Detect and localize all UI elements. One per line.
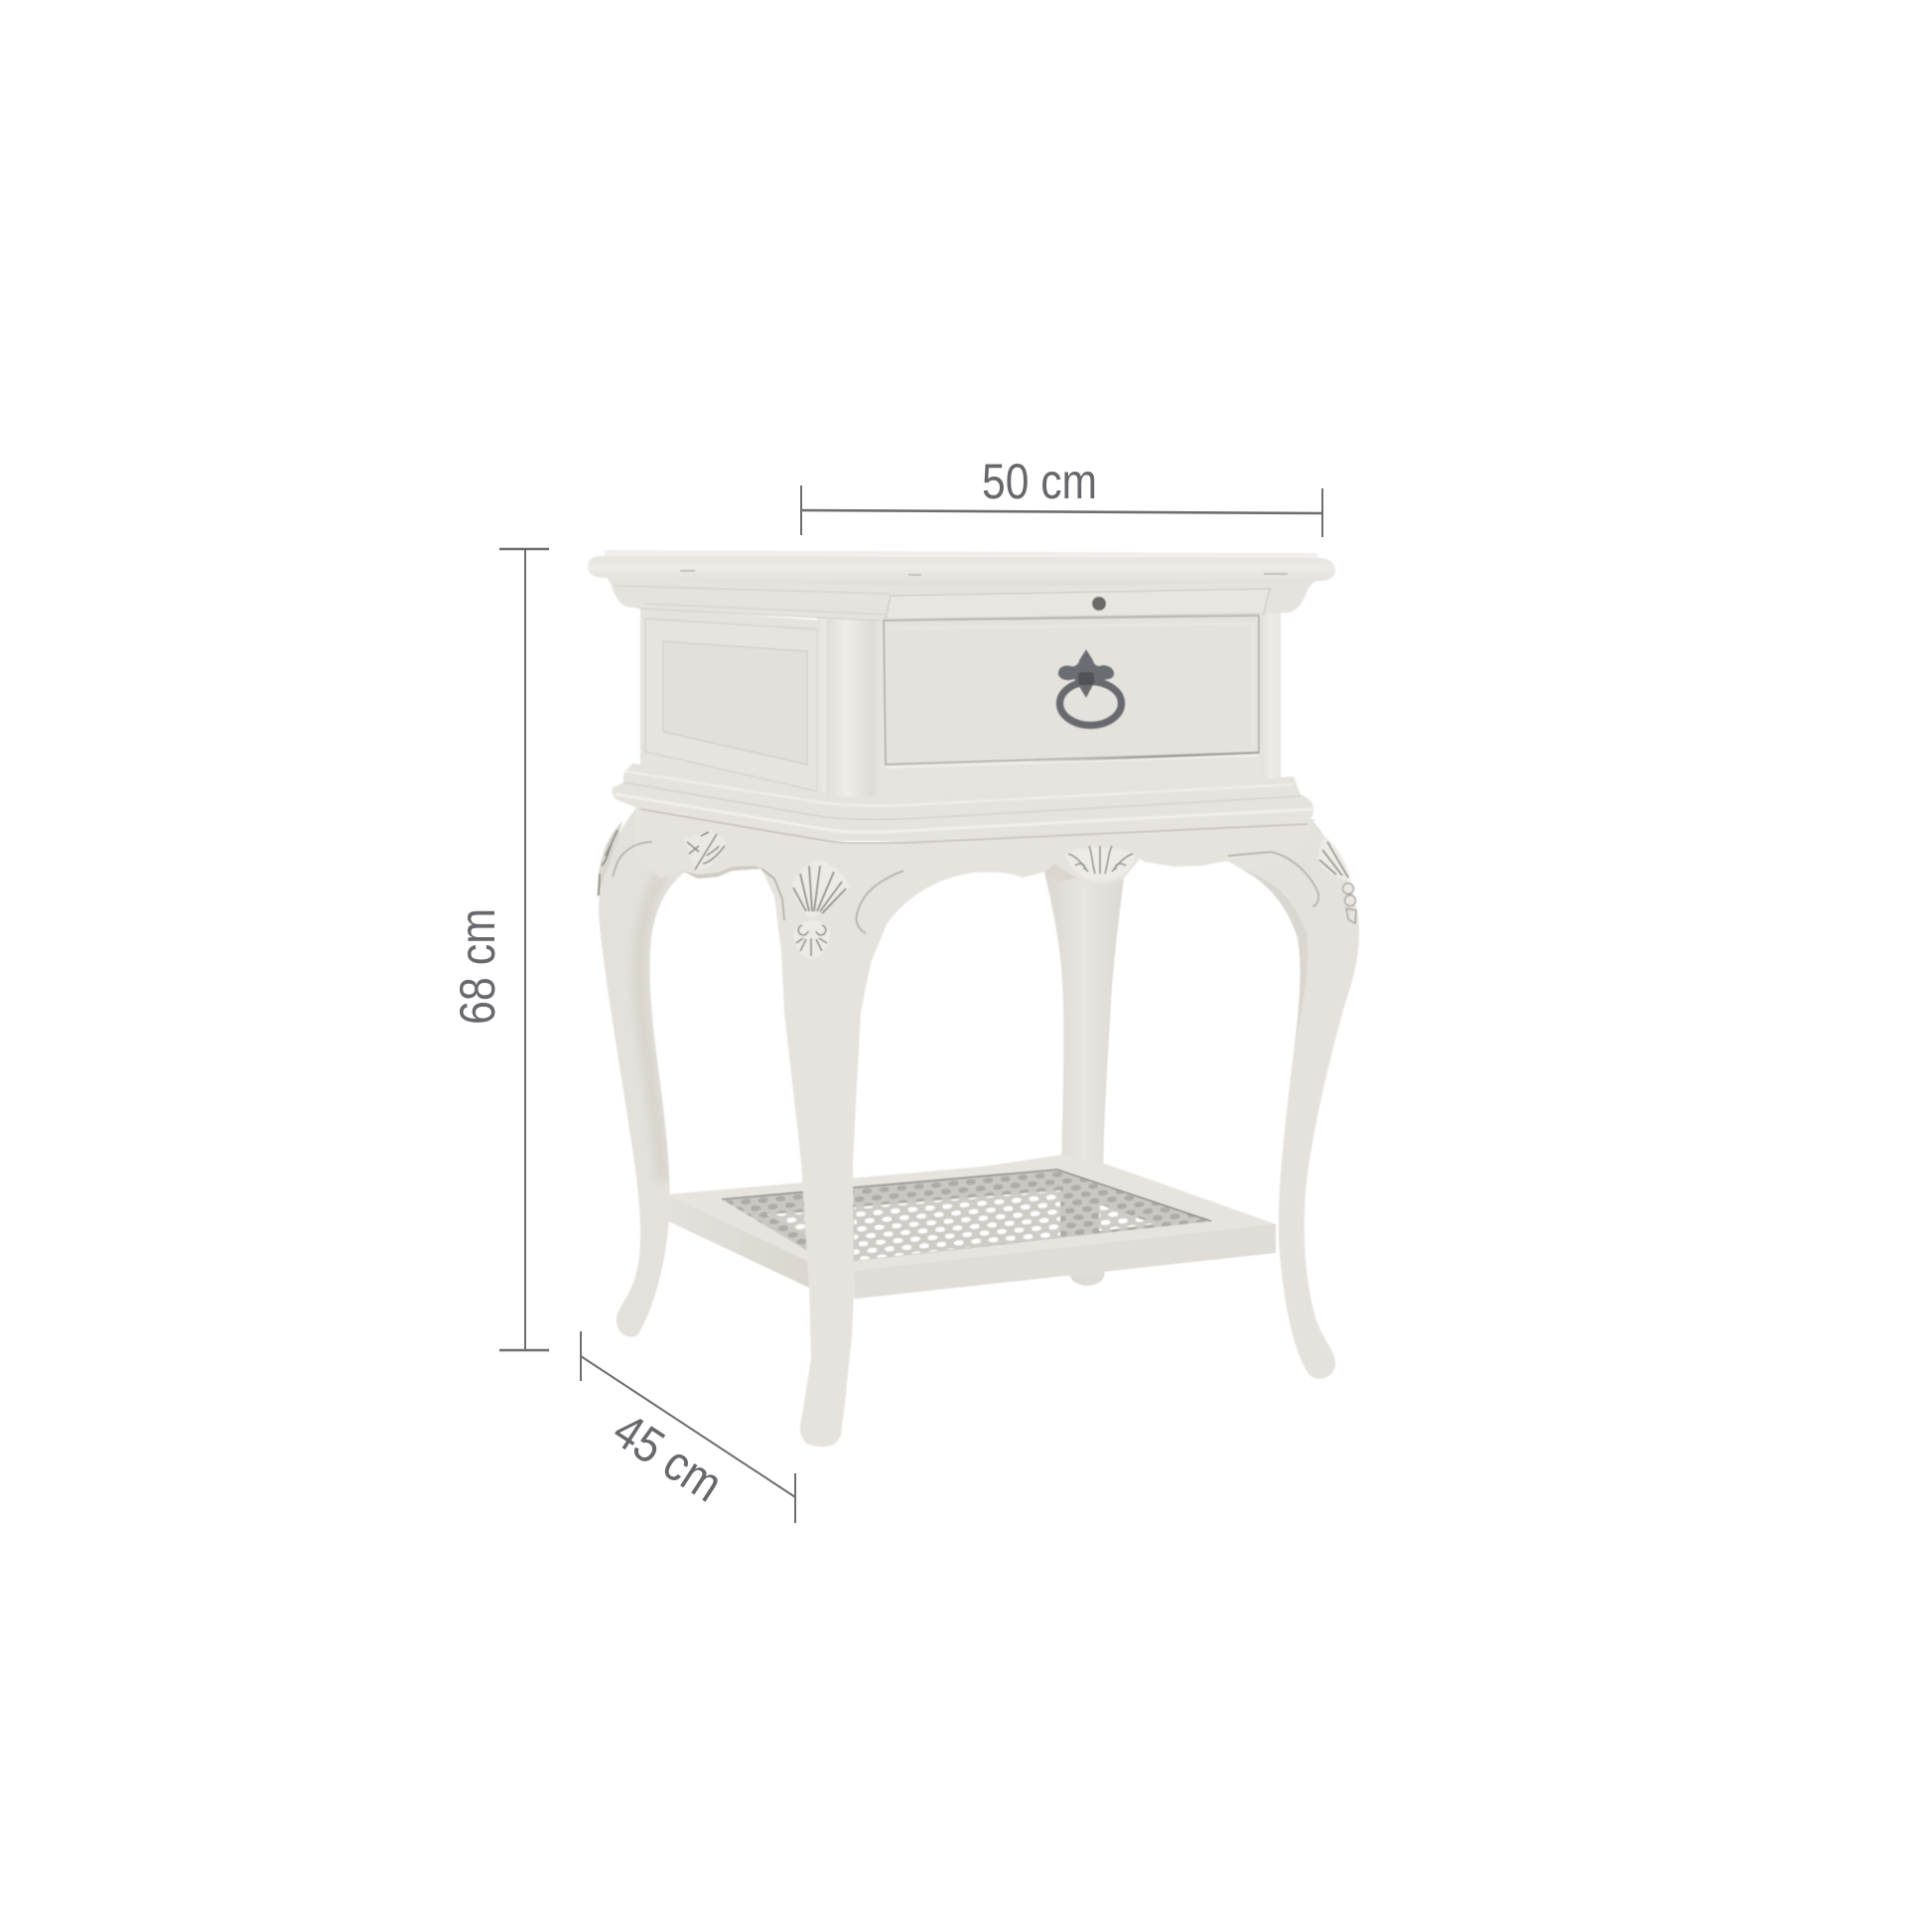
back left leg inner shading bbox=[639, 874, 663, 1181]
dimension: depth 45 cm: 45 cm bbox=[604, 1402, 732, 1512]
carved arch lines bbox=[613, 842, 1318, 933]
table top lip bbox=[588, 556, 1335, 586]
base moulding bbox=[613, 763, 1313, 843]
cane shelf insert bbox=[722, 1170, 1211, 1264]
right post bbox=[1261, 613, 1281, 779]
front face bbox=[879, 616, 1261, 799]
back leg foot under shelf bbox=[1070, 1262, 1104, 1286]
pull-out slide bbox=[886, 589, 1271, 620]
corner pilaster bbox=[817, 616, 882, 800]
ring handle bbox=[1058, 649, 1122, 725]
table top surface bbox=[605, 550, 1317, 560]
shelf left side face bbox=[668, 1195, 809, 1288]
right leg arch shading bbox=[1244, 871, 1308, 1052]
furniture: bedside table bbox=[588, 550, 1359, 1447]
carving: leaf on left apron bbox=[685, 830, 728, 872]
slide knob bbox=[1092, 597, 1106, 611]
shelf front rail bbox=[854, 1224, 1276, 1299]
drawer front bbox=[884, 616, 1259, 767]
dimension: height 68 cm: 68 cm bbox=[450, 908, 505, 1025]
apron and front leg bbox=[635, 806, 1315, 1447]
drawer case: left side panel bbox=[640, 608, 824, 806]
carving: shell on front left leg bbox=[792, 861, 850, 959]
dimension: height 68 cm bbox=[450, 549, 549, 1350]
dimension: width 50 cm: 50 cm bbox=[982, 454, 1097, 509]
handle backplate bbox=[1058, 649, 1114, 698]
dimension: width 50 cm bbox=[801, 454, 1322, 537]
apron underside shadow bbox=[682, 866, 761, 879]
handle mount bbox=[1078, 672, 1094, 685]
carving: shell on right leg bbox=[1318, 837, 1356, 923]
palmette below shell bbox=[794, 920, 830, 959]
dimension: depth 45 cm bbox=[581, 1331, 795, 1523]
carving: shell at front apron centre bbox=[1065, 846, 1135, 882]
handle ring bbox=[1060, 681, 1122, 725]
cove moulding under top bbox=[606, 576, 1315, 620]
side panel recess bbox=[645, 619, 817, 791]
carving: shell on back left leg bbox=[597, 821, 622, 898]
front right leg bbox=[1221, 820, 1359, 1379]
back left leg bbox=[599, 809, 715, 1336]
middle arch shadow bbox=[1045, 864, 1077, 882]
cove highlights bbox=[616, 586, 891, 621]
shelf frame bbox=[668, 1155, 1276, 1299]
infographic: table with dimensions bbox=[460, 464, 1360, 1523]
lip nicks bbox=[680, 571, 1288, 575]
back right leg bbox=[1042, 864, 1125, 1172]
